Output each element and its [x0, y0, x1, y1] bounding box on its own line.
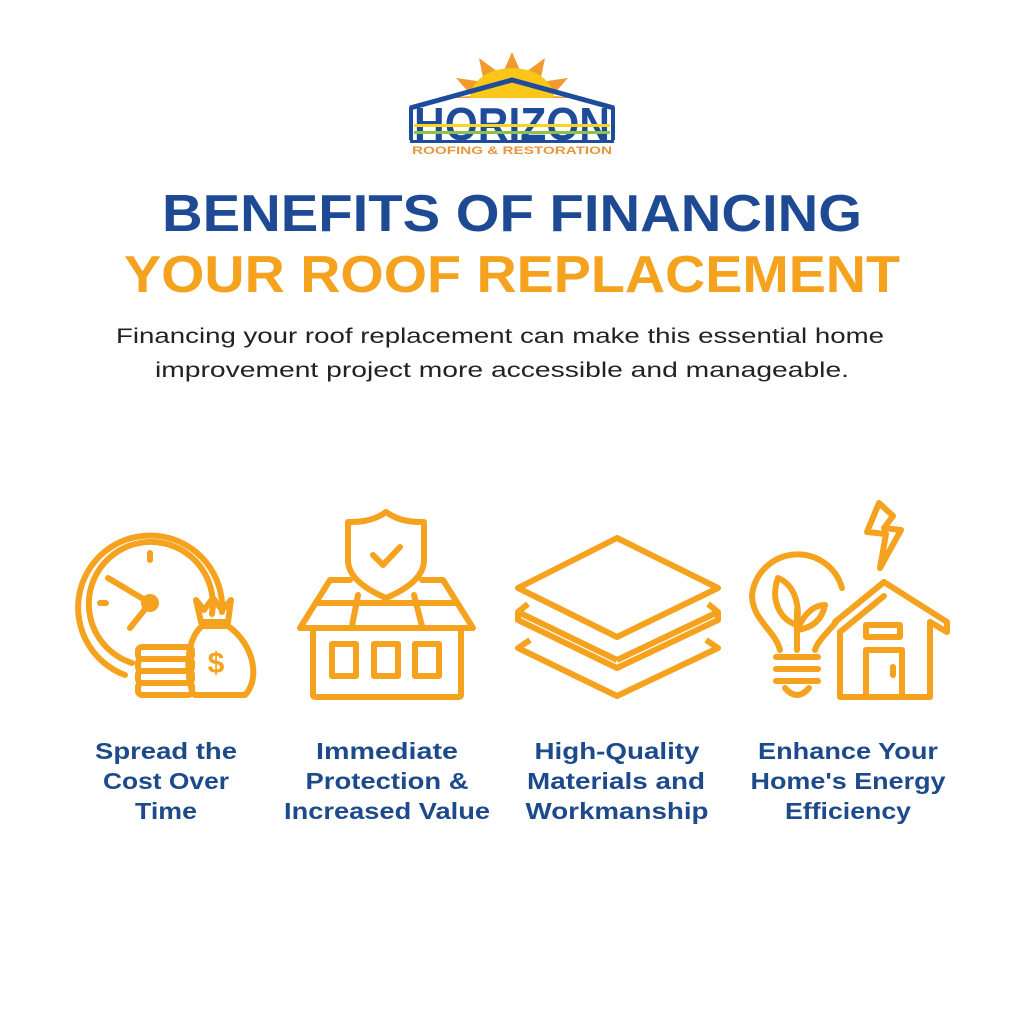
- label: energy efficiency: Efficiency: [785, 798, 911, 824]
- label: high quality: Workmanship: [526, 798, 708, 824]
- icon: material layers: [518, 538, 718, 696]
- label: energy efficiency: Home's Energy: [750, 768, 946, 794]
- label: high quality: High-Quality: [534, 738, 700, 764]
- subtitle: Financing your roof replacement can make this essential home: [116, 325, 884, 348]
- label: spread the cost: [95, 738, 237, 824]
- label: immediate protection: [284, 738, 490, 824]
- icon: clock and money: [78, 536, 253, 695]
- icon: clock and money: $: [208, 647, 225, 680]
- title: YOUR ROOF REPLACEMENT: [124, 246, 900, 304]
- logo: [410, 52, 614, 157]
- labels: [95, 738, 946, 824]
- subtitle: improvement project more accessible and manageable.: [155, 359, 849, 382]
- subtitle: [116, 325, 884, 382]
- icon: house with shield: [300, 512, 473, 697]
- label: energy efficiency: [750, 738, 946, 824]
- label: high quality: Materials and: [527, 768, 705, 794]
- label: immediate protection: Protection &: [306, 768, 468, 794]
- logo roof: [410, 80, 614, 108]
- label: spread the cost: Cost Over: [103, 768, 229, 794]
- logo sun: [440, 52, 585, 98]
- title: BENEFITS OF FINANCING: [162, 185, 862, 243]
- label: high quality: [526, 738, 708, 824]
- logo: ROOFING & RESTORATION: [412, 145, 612, 157]
- label: energy efficiency: Enhance Your: [758, 738, 938, 764]
- label: spread the cost: Spread the: [95, 738, 237, 764]
- title: [124, 185, 900, 304]
- label: immediate protection: Increased Value: [284, 798, 490, 824]
- logo wordmark: HORIZON: [414, 98, 610, 150]
- label: spread the cost: Time: [135, 798, 197, 824]
- icon: bulb and house: [752, 503, 947, 697]
- label: immediate protection: Immediate: [316, 738, 458, 764]
